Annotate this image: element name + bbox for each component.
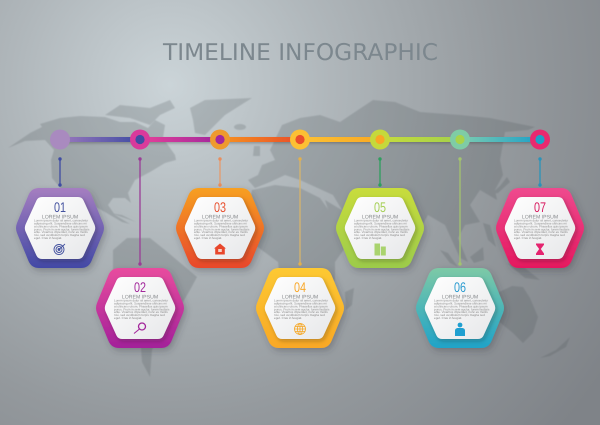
body text 02: nisi, sed vestibulum turpis magna sed [114,313,165,317]
body text 06: Lorem ipsum dolor sit amet, consectetur [434,299,488,303]
body text 03: Lorem ipsum dolor sit amet, consectetur [194,219,248,223]
connector lines [58,157,542,266]
number 05: 05 [374,199,386,215]
icon: person [455,323,465,336]
body text 07: adipiscing elit. Suspendisse ultricies mi [514,222,567,226]
number 03: 03 [214,199,226,215]
body text 01: purus. Proin in sem auctor, lorem facilisis [34,227,90,231]
body text 07: at ultricies rutrum. Phasellus quis ipsum [514,224,568,228]
heading 01: LOREM IPSUM [42,215,78,221]
body text 05: ante. Vivamus imperdiet, nunc eu mollis [354,230,408,234]
body text 02: at ultricies rutrum. Phasellus quis ipsum [114,304,168,308]
heading 06: LOREM IPSUM [442,295,478,301]
connector 02 [138,157,142,266]
connector 01 [58,157,62,187]
number 06: 06 [454,279,466,295]
number 04: 04 [294,279,306,295]
body text 02: adipiscing elit. Suspendisse ultricies mi [114,302,167,306]
panel 06 [416,268,504,348]
body text 02: purus. Proin in sem auctor, lorem facilisis [114,307,170,311]
body text 01: nisi, sed vestibulum turpis magna sed [34,233,85,237]
icon: house [214,244,226,254]
panel 07 [496,188,584,268]
body text 04: at ultricies rutrum. Phasellus quis ipsum [274,304,328,308]
world map [8,98,570,377]
body text 05: Lorem ipsum dolor sit amet, consectetur [354,219,408,223]
body text 01: eget. Cras in feugiat. [34,236,62,240]
panel 01 [16,188,104,268]
panel 04 [256,268,344,348]
body text 05: eget. Cras in feugiat. [354,236,382,240]
body text 05: purus. Proin in sem auctor, lorem facilisis [354,227,410,231]
heading 07: LOREM IPSUM [522,215,558,221]
number 07: 07 [534,199,546,215]
heading 04: LOREM IPSUM [282,295,318,301]
body text 07: ante. Vivamus imperdiet, nunc eu mollis [514,230,568,234]
body text 01: adipiscing elit. Suspendisse ultricies mi [34,222,87,226]
body text 06: adipiscing elit. Suspendisse ultricies mi [434,302,487,306]
icon: buildings [374,244,386,256]
body text 04: nisi, sed vestibulum turpis magna sed [274,313,325,317]
body text 03: ante. Vivamus imperdiet, nunc eu mollis [194,230,248,234]
body text 01: Lorem ipsum dolor sit amet, consectetur [34,219,88,223]
connector 04 [298,157,302,266]
body text 03: eget. Cras in feugiat. [194,236,222,240]
body text 02: Lorem ipsum dolor sit amet, consectetur [114,299,168,303]
body text 01: ante. Vivamus imperdiet, nunc eu mollis [34,230,88,234]
panel 02 [96,268,184,348]
icon: target [54,244,65,254]
connector 05 [378,157,382,187]
body text 05: at ultricies rutrum. Phasellus quis ipsum [354,224,408,228]
icon: hourglass [536,244,544,255]
body text 01: at ultricies rutrum. Phasellus quis ipsum [34,224,88,228]
body text 03: nisi, sed vestibulum turpis magna sed [194,233,245,237]
body text 03: adipiscing elit. Suspendisse ultricies mi [194,222,247,226]
body text 02: eget. Cras in feugiat. [114,316,142,320]
heading 05: LOREM IPSUM [362,215,398,221]
connector 03 [218,157,222,187]
body text 04: purus. Proin in sem auctor, lorem facilisis [274,307,330,311]
icon: magnifier [134,323,146,334]
body text 04: Lorem ipsum dolor sit amet, consectetur [274,299,328,303]
body text 06: purus. Proin in sem auctor, lorem facilisis [434,307,490,311]
icon: globe [294,324,306,334]
body text 06: eget. Cras in feugiat. [434,316,462,320]
panel 03 [176,188,264,268]
body text 06: nisi, sed vestibulum turpis magna sed [434,313,485,317]
body text 07: eget. Cras in feugiat. [514,236,542,240]
heading 03: LOREM IPSUM [202,215,238,221]
body text 02: ante. Vivamus imperdiet, nunc eu mollis [114,310,168,314]
body text 05: nisi, sed vestibulum turpis magna sed [354,233,405,237]
body text 03: at ultricies rutrum. Phasellus quis ipsum [194,224,248,228]
number 02: 02 [134,279,146,295]
panel 05 [336,188,424,268]
number 01: 01 [54,199,66,215]
body text 03: purus. Proin in sem auctor, lorem facilisis [194,227,250,231]
body text 07: nisi, sed vestibulum turpis magna sed [514,233,565,237]
body text 05: adipiscing elit. Suspendisse ultricies mi [354,222,407,226]
body text 06: at ultricies rutrum. Phasellus quis ipsum [434,304,488,308]
title: TIMELINE INFOGRAPHIC [162,40,438,66]
connector 07 [538,157,542,187]
body text 06: ante. Vivamus imperdiet, nunc eu mollis [434,310,488,314]
body text 04: adipiscing elit. Suspendisse ultricies mi [274,302,327,306]
body text 04: ante. Vivamus imperdiet, nunc eu mollis [274,310,328,314]
body text 07: purus. Proin in sem auctor, lorem facilisis [514,227,570,231]
body text 04: eget. Cras in feugiat. [274,316,302,320]
timeline bar [50,130,550,150]
body text 07: Lorem ipsum dolor sit amet, consectetur [514,219,568,223]
connector 06 [458,157,462,266]
heading 02: LOREM IPSUM [122,295,158,301]
